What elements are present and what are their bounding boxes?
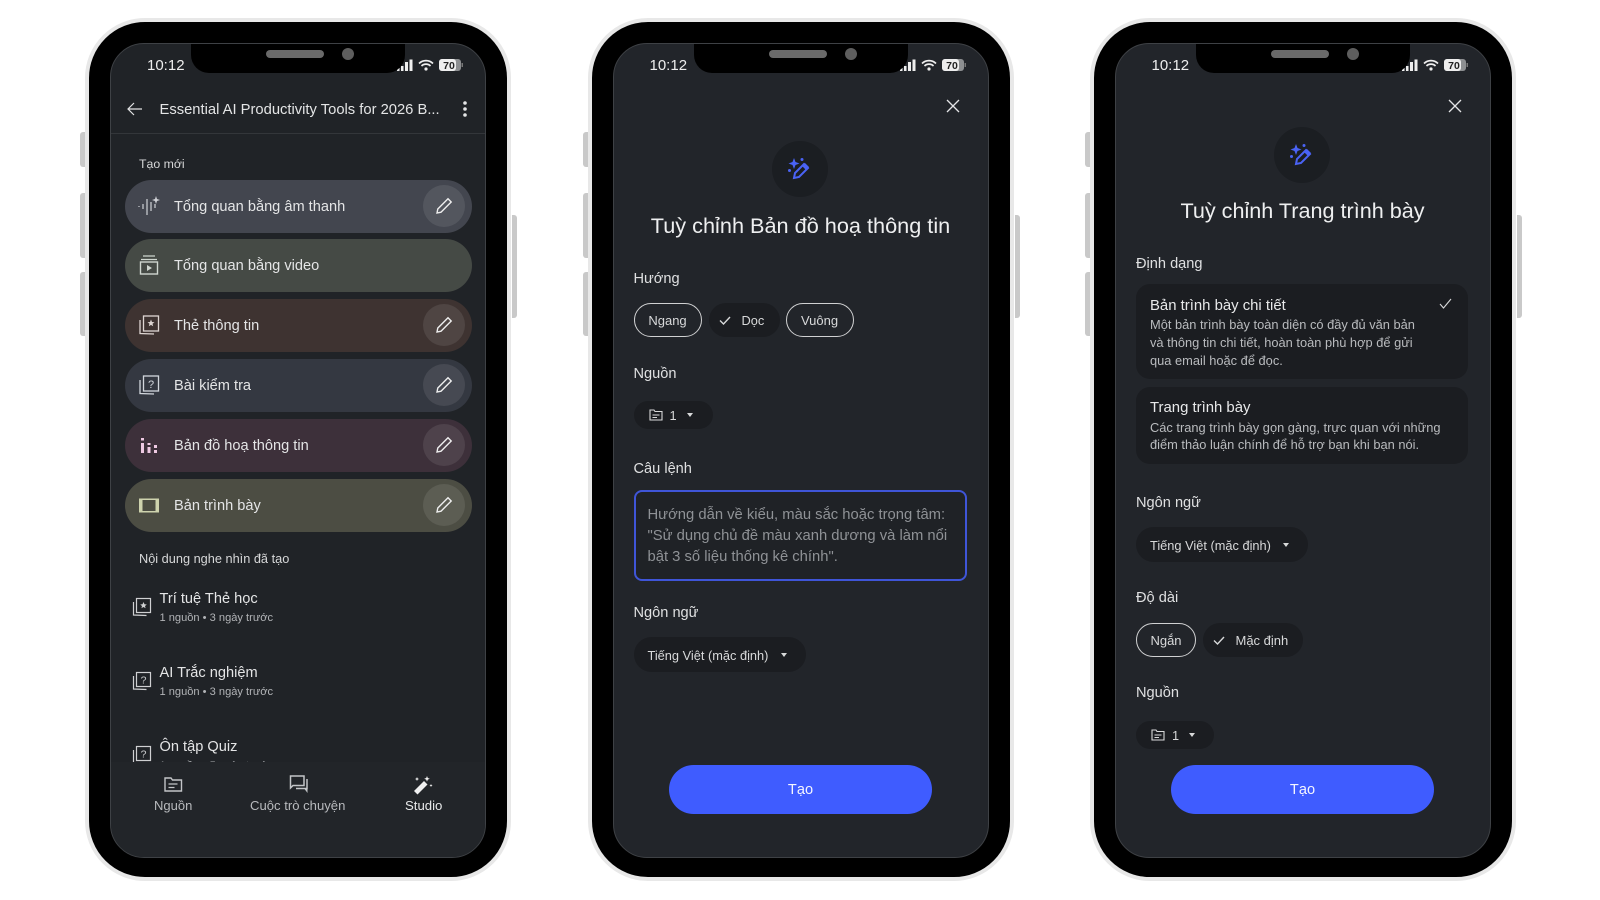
pill: slides <box>125 479 472 532</box>
pill: video overview: Tổng quan bằng video <box>174 258 319 274</box>
nav icon: chat <box>290 775 308 793</box>
edit button <box>423 364 465 406</box>
side button: volume down <box>1084 272 1090 336</box>
side button: mute <box>1084 132 1090 167</box>
close icon <box>946 100 960 112</box>
side button: power <box>1014 215 1020 318</box>
header title: Essential AI Productivity Tools for 2026 B... <box>160 102 440 118</box>
status time: 10:12 <box>1152 57 1189 74</box>
card: presenter slides: điểm thảo luận chính để hỗ trợ bạn khi bạn nói. <box>1150 437 1419 452</box>
side button: power <box>1516 215 1522 318</box>
label: length: Độ dài <box>1136 590 1178 606</box>
icon: audio <box>138 196 160 215</box>
screen: studio list <box>110 43 486 858</box>
magic icon circle <box>1274 127 1330 183</box>
edit button <box>423 424 465 466</box>
chip: square <box>786 303 854 337</box>
side button: power <box>512 215 517 318</box>
card: presenter slides: Các trang trình bày gọn gàng, trực quan với những <box>1150 420 1441 434</box>
side button: mute <box>80 132 85 167</box>
create button: Tạo <box>788 782 813 798</box>
icon: quiz <box>139 375 160 395</box>
status icons: 70 <box>946 60 957 72</box>
card: detailed deck: và thông tin chi tiết, hoàn toàn phù hợp để gửi <box>1150 335 1413 350</box>
label: source: Nguồn <box>634 366 677 382</box>
source dropdown: 1 <box>670 408 677 423</box>
status time: 10:12 <box>147 57 185 74</box>
status icons: 70 <box>443 60 455 72</box>
prompt textarea: bật 3 số liệu thống kê chính". <box>648 548 838 564</box>
side button: volume up <box>80 193 85 258</box>
edit button <box>423 304 465 346</box>
chip: short <box>1136 623 1196 657</box>
side button: volume down <box>582 272 588 336</box>
side button: volume down <box>80 272 85 336</box>
label: format: Định dạng <box>1136 256 1203 272</box>
icon: quiz: ? <box>148 379 154 391</box>
pill: flashcards <box>125 299 472 352</box>
notch <box>191 43 405 73</box>
pill: video overview <box>125 239 472 292</box>
icon: flashcards <box>139 315 160 335</box>
list item: quiz 1: ? <box>141 674 147 686</box>
create button: Tạo <box>1290 782 1315 798</box>
source dropdown <box>1136 721 1214 749</box>
dialog title: Tuỳ chỉnh Trang trình bày <box>1180 198 1425 223</box>
card: presenter slides <box>1136 387 1468 464</box>
label: prompt: Câu lệnh <box>634 461 692 477</box>
chip: short: Ngắn <box>1150 633 1182 648</box>
pill: infographic <box>125 419 472 472</box>
status icons <box>397 59 463 72</box>
chip: square: Vuông <box>801 313 838 328</box>
screen: infographic dialog <box>612 43 988 858</box>
nav label: sources: Nguồn <box>154 798 192 813</box>
side button: volume up <box>582 193 588 258</box>
create button <box>669 765 932 814</box>
pill: infographic: Bản đồ hoạ thông tin <box>174 438 309 454</box>
chip: default selected <box>1202 623 1302 657</box>
chip: portrait selected: Dọc <box>742 313 764 328</box>
card: detailed deck: qua email hoặc để đọc. <box>1150 353 1283 368</box>
list item: quiz 1: AI Trắc nghiệm <box>160 665 258 681</box>
pill: quiz <box>125 359 472 412</box>
side button: mute <box>582 132 588 167</box>
icon: slides <box>139 498 159 512</box>
pill: quiz: Bài kiểm tra <box>174 378 251 394</box>
card: detailed deck: Một bản trình bày toàn diện có đầy đủ văn bản <box>1150 317 1415 332</box>
source dropdown <box>634 401 712 429</box>
notch <box>694 43 908 73</box>
status icons: 70 <box>1448 60 1459 72</box>
phone: studio list <box>85 18 511 881</box>
nav icon: sources <box>164 777 182 792</box>
status icons <box>1402 59 1468 72</box>
pill: audio overview <box>125 180 472 233</box>
label: language: Ngôn ngữ <box>1136 495 1201 511</box>
chip: landscape: Ngang <box>648 313 687 328</box>
icon: video <box>140 255 158 275</box>
label: source: Nguồn <box>1136 685 1179 701</box>
close icon <box>1448 100 1462 112</box>
back arrow <box>127 102 142 116</box>
language dropdown <box>1136 527 1308 562</box>
chip: default selected: Mặc định <box>1236 633 1288 648</box>
pill: audio overview: Tổng quan bằng âm thanh <box>174 199 345 215</box>
pill: flashcards: Thẻ thông tin <box>174 318 259 334</box>
status time: 10:12 <box>650 57 687 74</box>
status icons <box>900 59 966 72</box>
screen: slides dialog <box>1114 43 1490 858</box>
notch <box>1196 43 1410 73</box>
nav label: chat: Cuộc trò chuyện <box>250 798 345 813</box>
source dropdown: 1 <box>1172 728 1179 743</box>
label: orientation: Hướng <box>634 271 680 287</box>
edit button <box>423 185 465 227</box>
list item: quiz 1 <box>132 664 273 698</box>
list item: quiz 2 <box>132 738 273 772</box>
nav icon: studio <box>414 776 432 794</box>
prompt textarea: Hướng dẫn về kiểu, màu sắc hoặc trọng tâm: <box>648 506 945 522</box>
language dropdown: Tiếng Việt (mặc định) <box>1150 538 1271 553</box>
section heading: generated media: Nội dung nghe nhìn đã tạo <box>139 551 289 566</box>
list item: quiz 2: 1 nguồn • 5 ngày trước <box>160 760 273 772</box>
label: language: Ngôn ngữ <box>634 605 698 621</box>
list item: quiz 2: Ôn tập Quiz <box>160 739 237 755</box>
edit button <box>423 484 465 526</box>
chip: portrait selected <box>708 303 780 337</box>
card: detailed deck <box>1136 284 1468 379</box>
language dropdown <box>634 637 806 672</box>
bottom navigation <box>111 762 487 858</box>
prompt textarea <box>634 490 966 581</box>
create button <box>1171 765 1434 814</box>
more menu <box>463 101 467 117</box>
card: detailed deck: Bản trình bày chi tiết <box>1150 298 1286 314</box>
prompt textarea: "Sử dụng chủ đề màu xanh dương và làm nổi <box>648 528 947 544</box>
side button: volume up <box>1084 193 1090 258</box>
phone: slides customization <box>1090 18 1516 881</box>
nav label: studio: Studio <box>405 798 442 813</box>
card: presenter slides: Trang trình bày <box>1150 400 1250 416</box>
chip: landscape <box>634 303 702 337</box>
language dropdown: Tiếng Việt (mặc định) <box>648 648 768 663</box>
icon: infographic <box>141 438 157 453</box>
list item: quiz 2: ? <box>141 748 147 760</box>
phone: infographic customization <box>588 18 1014 881</box>
magic icon circle <box>772 141 828 197</box>
list item: flashcards <box>132 591 273 624</box>
list item: quiz 1: 1 nguồn • 3 ngày trước <box>160 686 273 698</box>
list item: flashcards: 1 nguồn • 3 ngày trước <box>160 612 273 624</box>
dialog title: Tuỳ chỉnh Bản đồ hoạ thông tin <box>651 213 950 238</box>
pill: slides: Bản trình bày <box>174 498 261 514</box>
list item: flashcards: Trí tuệ Thẻ học <box>160 591 258 607</box>
section heading: create new: Tạo mới <box>139 157 185 171</box>
